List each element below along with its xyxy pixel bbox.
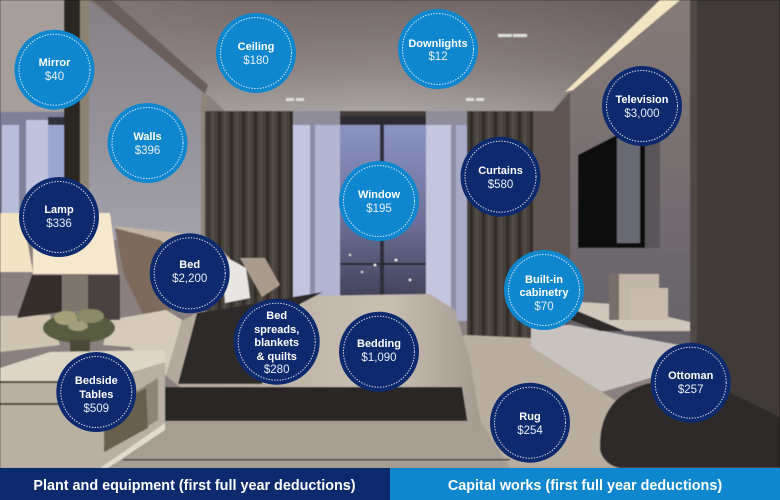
- bubble: window: Window: [358, 189, 400, 201]
- legend bar: plant and equipment: [0, 468, 390, 500]
- ceiling: [88, 0, 670, 111]
- bubble: bed spreads, blankets and quilts: & quilts: [257, 351, 297, 363]
- bubble: television: Television: [616, 94, 669, 106]
- bubble: bed spreads, blankets and quilts: blankets: [254, 337, 299, 349]
- bubble: bed: [150, 233, 230, 313]
- headboard: [115, 226, 230, 310]
- back wall window area: [205, 111, 555, 311]
- floor: [110, 335, 720, 468]
- bubble: bed spreads, blankets and quilts: Bed: [266, 310, 287, 322]
- flowers: [43, 309, 115, 358]
- headboard behind lamp: [88, 275, 120, 320]
- downlights: [286, 34, 527, 101]
- bubble: ottoman: Ottoman: [668, 370, 714, 382]
- carpet: [110, 420, 510, 468]
- bubble: bed spreads, blankets and quilts: [234, 299, 320, 385]
- bubble: bedding: $1,090: [361, 352, 397, 364]
- bubble: television: $3,000: [624, 108, 660, 120]
- bubble: bed: $2,200: [172, 273, 207, 285]
- right curtain: [467, 111, 533, 338]
- television: [578, 135, 660, 248]
- bubble: bedside tables: $509: [84, 403, 109, 415]
- bubble: downlights: Downlights: [408, 38, 468, 50]
- bubble: ottoman: [651, 343, 731, 423]
- bubble: bedside tables: [56, 352, 136, 432]
- legend bar: plant and equipment: Plant and equipment (first full year deductions): [33, 478, 356, 494]
- left sheet: [0, 315, 60, 352]
- bubble: walls: $396: [135, 145, 160, 157]
- bubble: bedside tables: Bedside: [75, 375, 118, 387]
- bubble: mirror: $40: [45, 71, 64, 83]
- bubble: walls: Walls: [133, 131, 162, 143]
- mirror wall panel: [88, 0, 205, 240]
- column: [690, 0, 697, 345]
- bubble: built-in cabinetry: [504, 250, 584, 330]
- bubble: mirror: [14, 30, 94, 110]
- ottoman: [600, 383, 780, 468]
- lamp base: [63, 273, 88, 311]
- duvet: [165, 294, 481, 425]
- lamp shades: [0, 213, 118, 274]
- bubble: bed: Bed: [179, 259, 200, 271]
- pillows: [115, 228, 280, 318]
- cabinet: [531, 325, 690, 392]
- bubble: rug: $254: [517, 425, 543, 437]
- mirror reflection of ceiling: [0, 0, 65, 112]
- right wall: [570, 0, 695, 345]
- bubble: curtains: $580: [488, 179, 513, 191]
- bubble: bed spreads, blankets and quilts: spreads,: [254, 324, 299, 336]
- bubble: ceiling: $180: [243, 55, 269, 67]
- legend bar: capital works: Capital works (first full year deductions): [448, 478, 722, 494]
- bubble: bedding: [339, 312, 419, 392]
- bubble: ceiling: [216, 13, 296, 93]
- bubble: window: [339, 161, 419, 241]
- legend bar: capital works: [390, 468, 780, 500]
- bubble: ceiling: Ceiling: [238, 41, 274, 53]
- far wall: [696, 0, 780, 425]
- cove light: [565, 0, 680, 92]
- bubble: rug: [490, 383, 570, 463]
- left curtain: [208, 111, 293, 311]
- bubble: bed spreads, blankets and quilts: $280: [264, 364, 289, 376]
- bubble: television: [602, 66, 682, 146]
- bubble: curtains: Curtains: [478, 165, 523, 177]
- mirror reflection of window: [0, 112, 65, 222]
- window view: [340, 116, 426, 306]
- bubble: lamp: [19, 177, 99, 257]
- bubble: built-in cabinetry: cabinetry: [520, 287, 569, 299]
- bubble: ottoman: $257: [678, 384, 703, 396]
- left sheers: [293, 111, 340, 301]
- bubble: built-in cabinetry: $70: [534, 301, 554, 313]
- bubble: built-in cabinetry: Built-in: [525, 274, 563, 286]
- dark cushion: [17, 275, 62, 318]
- bubble: window: $195: [366, 203, 392, 215]
- bubble: curtains: [460, 137, 540, 217]
- bubble: walls: [108, 103, 188, 183]
- bubble: lamp: $336: [46, 218, 72, 230]
- bubble: downlights: [398, 9, 478, 89]
- wall recess: [533, 92, 570, 345]
- bubble: downlights: $12: [428, 51, 448, 63]
- books: [609, 274, 668, 320]
- mirror frame columns: [64, 0, 208, 244]
- bedside table: [0, 350, 165, 468]
- dark throw: [178, 292, 323, 384]
- bubble: bedding: Bedding: [357, 338, 401, 350]
- sheets on near bed: [103, 310, 182, 375]
- bubble: lamp: Lamp: [44, 204, 74, 216]
- right sheers: [426, 111, 467, 321]
- bubble: mirror: Mirror: [39, 57, 71, 69]
- bubble: rug: Rug: [519, 411, 541, 423]
- bubble: bedside tables: Tables: [79, 389, 113, 401]
- bed base: [165, 387, 470, 421]
- shelf: [575, 302, 690, 331]
